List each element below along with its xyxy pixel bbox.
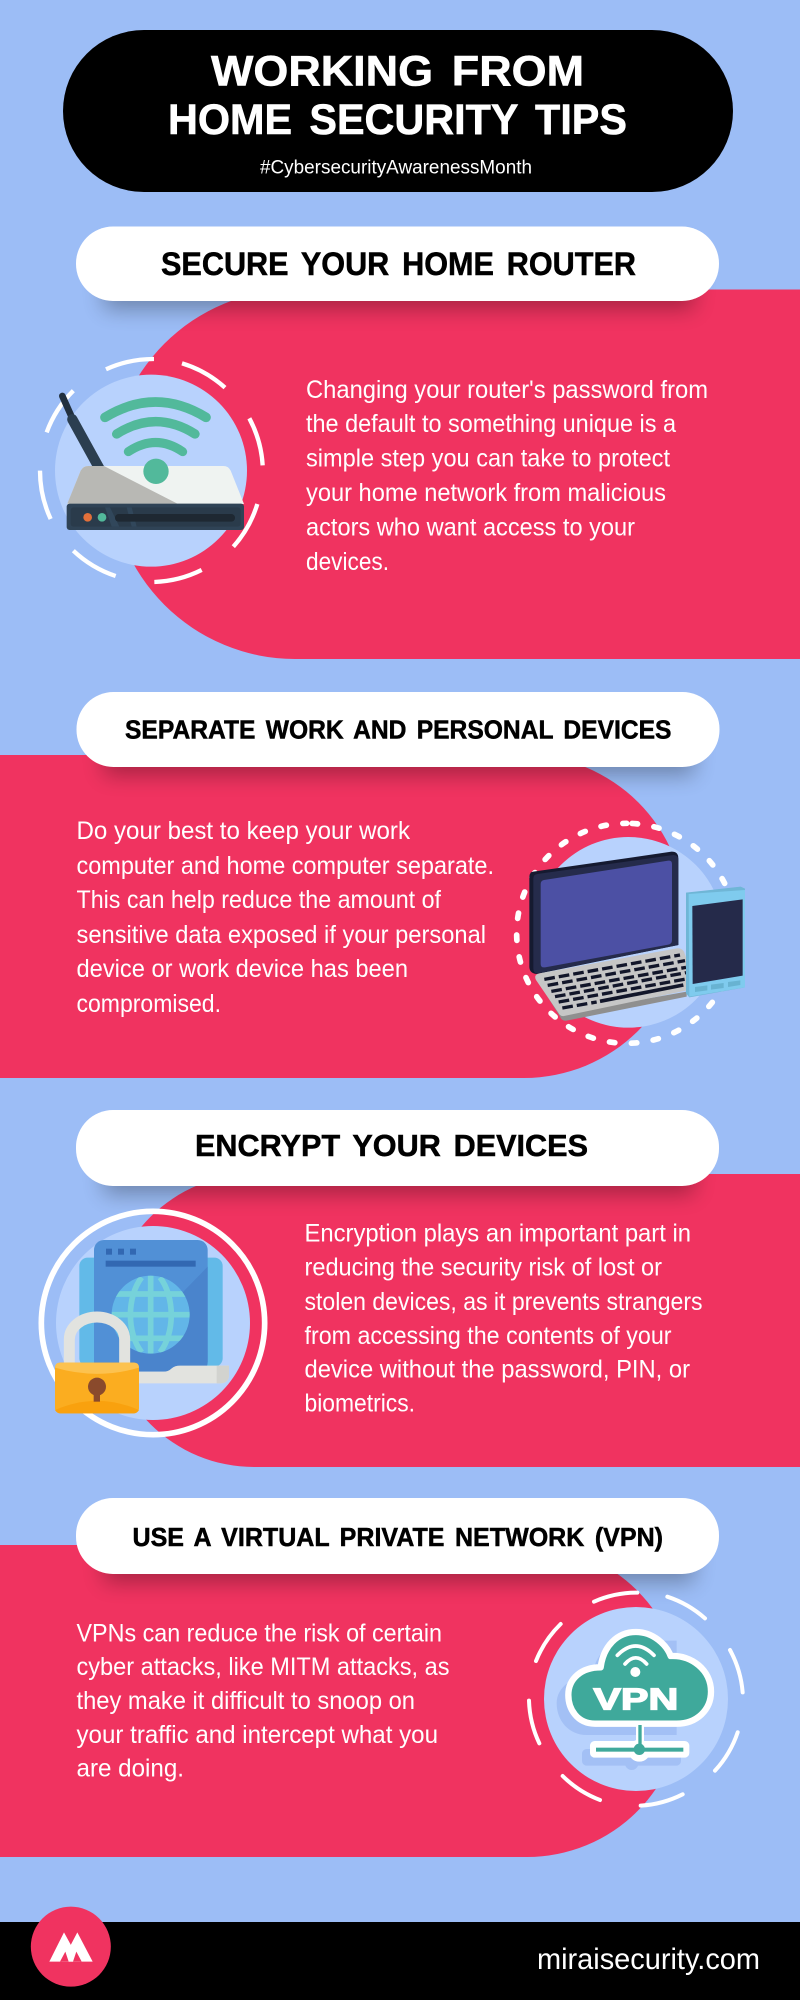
text: VPN tip: are doing. [76,1754,184,1782]
logo [31,1907,111,1987]
section 2 heading pill [76,692,720,775]
text: VPN tip: your traffic and intercept what you [76,1721,438,1749]
text: VPN tip: cyber attacks, like MITM attacks, as [76,1653,450,1681]
footer website: miraisecurity.com [537,1943,760,1976]
text: encrypt tip [304,1220,702,1418]
text: VPN tip [76,1620,450,1782]
title: WORKING FROM [211,48,584,96]
text: separate devices tip: compromised. [76,990,221,1018]
icon: padlock and browser window [41,1211,265,1435]
title: HOME SECURITY TIPS [168,96,627,144]
text: VPN tip: they make it difficult to snoop on [76,1687,415,1715]
panel: encrypt devices background [108,1174,800,1467]
section 1 heading pill: SECURE YOUR HOME ROUTER [161,246,636,282]
icon: VPN cloud [529,1593,743,1806]
text: encrypt tip: biometrics. [304,1390,415,1418]
text: separate devices tip: This can help reduce the amount of [76,886,441,914]
text: separate devices tip [76,817,494,1018]
text: separate devices tip: sensitive data exposed if your personal [76,921,486,949]
text: encrypt tip: stolen devices, as it prevents strangers [304,1288,702,1316]
icon: router [40,359,263,582]
text: VPN tip: VPNs can reduce the risk of certain [76,1620,442,1648]
hashtag: #CybersecurityAwarenessMonth [260,158,532,178]
text: encrypt tip: device without the password, PIN, or [304,1356,690,1384]
title [168,48,627,144]
text: separate devices tip: computer and home computer separate. [76,852,494,880]
section 2 heading pill: SEPARATE WORK AND PERSONAL DEVICES [125,716,672,744]
title banner [63,30,733,192]
text: router tip: the default to something unique is a [306,410,676,438]
text: router tip [306,376,708,576]
section 3 heading pill [76,1110,719,1194]
panel: separate devices background [0,755,686,1078]
text: separate devices tip: device or work device has been [76,955,408,983]
text: separate devices tip: Do your best to keep your work [76,817,410,845]
section 4 heading pill: USE A VIRTUAL PRIVATE NETWORK (VPN) [132,1522,663,1552]
icon: laptop and phone [517,823,745,1043]
section 3 heading pill: ENCRYPT YOUR DEVICES [195,1128,588,1163]
panel: VPN background [0,1545,683,1857]
footer bar [0,1922,800,2000]
text: router tip: devices. [306,548,389,576]
text: router tip: simple step you can take to protect [306,444,670,472]
text: encrypt tip: Encryption plays an important part in [304,1220,691,1248]
icon: VPN cloud: VPN [593,1681,678,1716]
text: router tip: Changing your router's password from [306,376,708,404]
section 4 heading pill [76,1498,719,1582]
text: encrypt tip: reducing the security risk of lost or [304,1254,662,1282]
text: encrypt tip: from accessing the contents of your [304,1322,672,1350]
text: router tip: your home network from malicious [306,479,666,507]
text: router tip: actors who want access to your [306,514,635,542]
section 1 heading pill [76,226,719,309]
panel: secure router background [110,290,800,659]
